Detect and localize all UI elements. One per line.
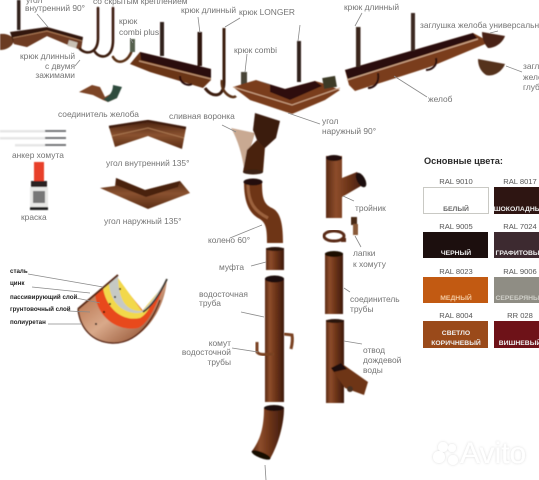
gutter assembly: top row xyxy=(0,0,505,114)
part labels: left and centre xyxy=(12,109,250,367)
part labels: left and centre: труба xyxy=(199,298,221,308)
bottom elbow xyxy=(251,405,284,462)
part labels: left and centre: сливная воронка xyxy=(169,111,235,121)
part labels: right column: дождевой xyxy=(363,355,402,365)
part labels: left and centre: водосточной xyxy=(182,347,231,357)
deep end cap xyxy=(478,59,505,75)
part labels: left and centre: соединитель желоба xyxy=(58,109,139,119)
gutter labels: top: крюк combi xyxy=(234,45,277,55)
long gutter right xyxy=(345,33,490,91)
part labels: right column: лапки xyxy=(353,248,376,258)
swatch: copper xyxy=(423,267,488,303)
part labels: left and centre: комут xyxy=(209,338,231,348)
swatch: silver xyxy=(494,267,539,303)
layer labels: грунтовочный слой xyxy=(10,306,71,313)
part labels: left and centre: колено 60° xyxy=(208,235,250,245)
outer corner 90 xyxy=(233,76,340,114)
gutter labels: top: внутренний 90° xyxy=(25,3,85,13)
part labels: left and centre: водосточная xyxy=(199,289,248,299)
part labels: right column: соединитель xyxy=(350,294,400,304)
gutter cross-section layers xyxy=(78,275,167,343)
swatch: copper: RAL 8023 xyxy=(439,267,473,276)
gutter labels: top: угол xyxy=(322,116,339,126)
swatch: cherry xyxy=(494,311,539,348)
colour palette xyxy=(423,156,539,348)
gutter labels: top: крюк длинный xyxy=(20,51,75,61)
sticks xyxy=(356,27,360,67)
second long hook xyxy=(222,80,236,97)
part labels: right column: воды xyxy=(363,365,383,375)
part labels: left and centre: анкер хомута xyxy=(12,150,64,160)
swatch: white: RAL 9010 xyxy=(439,177,473,186)
swatch: black: RAL 9005 xyxy=(439,222,473,231)
layer labels: цинк xyxy=(10,280,25,287)
combi clip xyxy=(241,72,247,89)
gutter labels: top: желоб xyxy=(428,94,453,104)
part labels: right column: тройник xyxy=(355,203,386,213)
tee xyxy=(326,155,368,218)
hook stick at inner corner xyxy=(17,0,20,30)
connector pipe xyxy=(325,251,343,314)
universal end cap xyxy=(482,32,505,48)
clamp ring xyxy=(324,231,346,242)
swatch: light brown: КОРИЧНЕВЫЙ xyxy=(431,338,481,347)
part labels: left and centre: угол внутренний 135° xyxy=(106,158,189,168)
inner corner 90 xyxy=(10,27,83,50)
coupling xyxy=(266,247,284,270)
swatch: black xyxy=(423,222,488,258)
gutter labels: top: крюк xyxy=(119,16,138,26)
long hook xyxy=(205,28,224,95)
part labels: left and centre: краска xyxy=(21,212,47,222)
stick xyxy=(198,32,202,66)
gutter connector xyxy=(79,85,122,102)
hooks xyxy=(80,8,133,62)
gutter labels: top: наружный 90° xyxy=(322,126,376,136)
anchors xyxy=(0,130,66,146)
layer labels: пассивирующий слой xyxy=(10,294,78,301)
part labels: right column xyxy=(350,203,402,375)
elbow 60 xyxy=(244,178,283,243)
funnel xyxy=(231,113,280,174)
swatch: cherry: RR 028 xyxy=(507,311,533,320)
gutter labels: top xyxy=(20,0,539,136)
part labels: left and centre: угол наружный 135° xyxy=(104,216,181,226)
gutter labels: top: с двумя xyxy=(45,61,75,71)
swatch: light brown xyxy=(423,311,488,348)
layer labels: полиуретан xyxy=(10,319,46,326)
inner corner 135 xyxy=(109,121,186,149)
combi plus clip xyxy=(130,39,135,52)
gutter labels: top: зажимами xyxy=(35,70,75,80)
palette heading: Основные цвета: xyxy=(424,156,503,166)
downpipe xyxy=(265,276,284,402)
part labels: left and centre: трубы xyxy=(208,357,231,367)
layer labels xyxy=(10,268,103,326)
swatch: black: ЧЕРНЫЙ xyxy=(441,248,471,257)
part labels: right column: трубы xyxy=(350,304,374,314)
swatch: copper: МЕДНЫЙ xyxy=(440,293,472,302)
long gutter section xyxy=(130,52,211,88)
swatch: silver: RAL 9006 xyxy=(503,267,537,276)
stick xyxy=(411,13,415,51)
rain diverter xyxy=(326,319,368,403)
paint bottle xyxy=(30,162,48,210)
swatch: graphite xyxy=(494,222,539,258)
swatch: graphite: RAL 7024 xyxy=(503,222,537,231)
swatch: light brown: СВЕТЛО xyxy=(442,330,470,337)
stick xyxy=(297,41,301,82)
swatch: light brown: RAL 8004 xyxy=(439,311,473,320)
pipe clamp xyxy=(257,334,292,354)
clamp tabs xyxy=(351,217,358,235)
swatch: chocolate xyxy=(494,177,539,214)
gutter labels: top: крюк LONGER xyxy=(239,7,295,17)
icon: gutter end cap left xyxy=(0,34,14,50)
gutter labels: top: combi plus xyxy=(119,27,159,37)
sticks xyxy=(160,22,164,56)
part labels: right column: отвод xyxy=(363,345,385,355)
gutter labels: top: крюк длинный xyxy=(344,2,399,12)
watermark: Avito: Avito xyxy=(460,437,526,470)
swatch: white xyxy=(424,177,488,214)
part labels: left and centre: муфта xyxy=(219,262,244,272)
gutter labels: top: крюк длинный xyxy=(181,5,236,15)
outer corner 135 xyxy=(100,178,190,209)
swatch: chocolate: RAL 8017 xyxy=(503,177,537,186)
swatch: white: БЕЛЫЙ xyxy=(443,204,469,213)
layer labels: сталь xyxy=(10,268,28,275)
part labels: right column: к хомуту xyxy=(353,259,387,269)
